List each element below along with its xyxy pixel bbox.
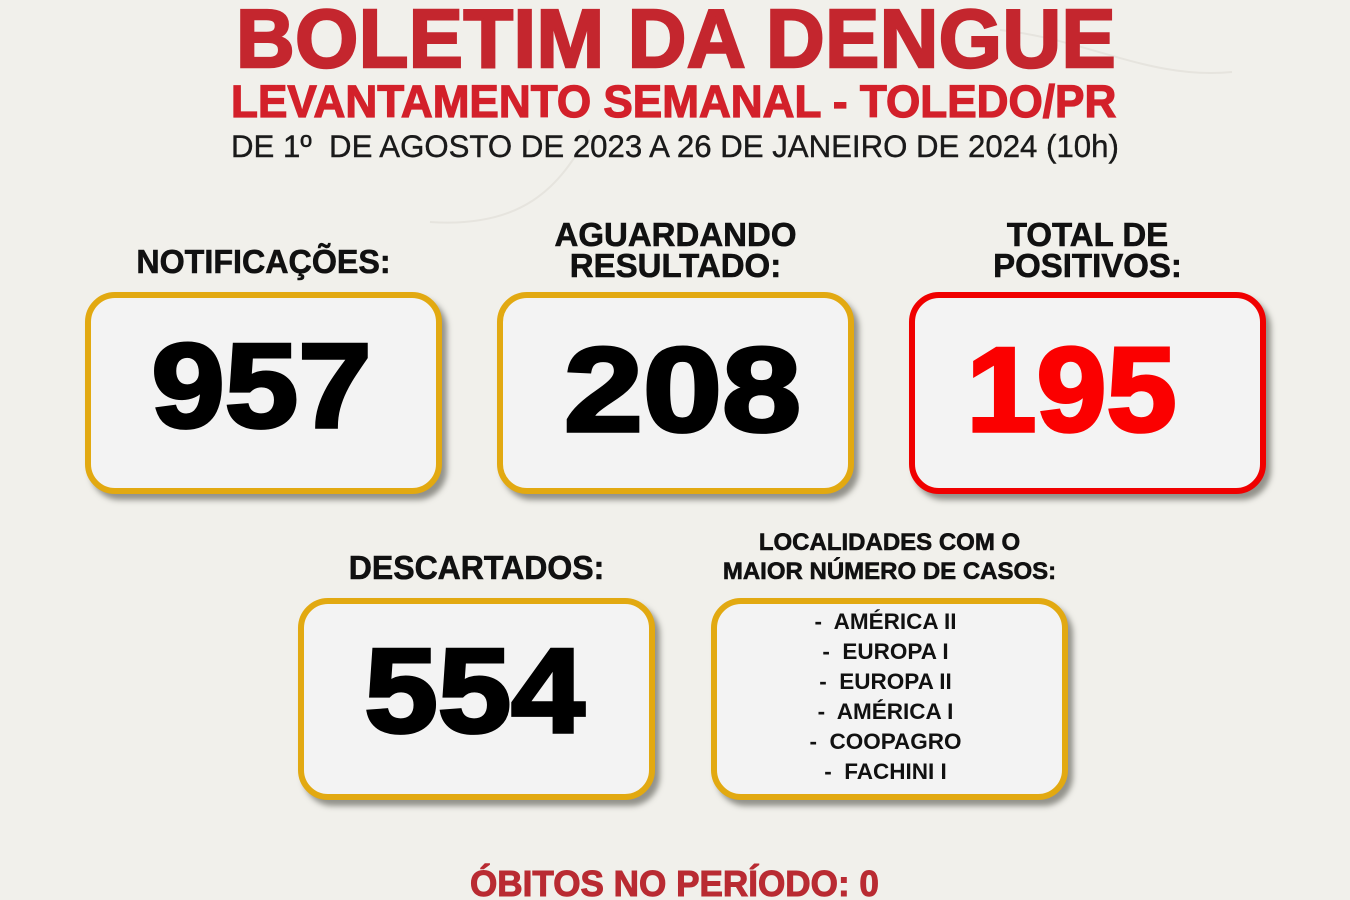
label: total de positivos [993,216,1182,284]
panel: notificações [85,292,442,494]
panel: localidades: - AMÉRICA II [814,609,957,634]
label: descartados: DESCARTADOS: [349,549,604,586]
label: total de positivos: TOTAL DE [1007,216,1168,253]
subtitle: LEVANTAMENTO SEMANAL - TOLEDO/PR [231,76,1116,127]
panel: localidades: - EUROPA II [819,669,952,694]
label: total de positivos: POSITIVOS: [993,247,1182,284]
label: aguardando resultado: RESULTADO: [570,247,781,284]
panel: descartados: 554 [364,624,584,758]
label: localidades: MAIOR NÚMERO DE CASOS: [723,558,1056,585]
label: localidades: LOCALIDADES COM O [759,529,1020,556]
panel: total de positivos: 195 [966,323,1177,457]
panel: localidades [711,598,1068,800]
panel: descartados [298,598,655,800]
panel: aguardando resultado: 208 [564,323,801,457]
label: aguardando resultado [554,216,796,284]
label: localidades [723,529,1056,585]
panel: localidades: - AMÉRICA I [818,699,953,724]
panel: localidades: - EUROPA I [822,639,949,664]
panel: localidades: - FACHINI I [824,759,947,784]
panel: notificações: 957 [151,319,371,453]
label: notificações: NOTIFICAÇÕES: [136,243,391,280]
panel: localidades: - COOPAGRO [809,729,962,754]
panel: total de positivos [909,292,1266,494]
panel: aguardando resultado [497,292,854,494]
label: aguardando resultado: AGUARDANDO [554,216,796,253]
date range: DE 1º DE AGOSTO DE 2023 A 26 DE JANEIRO DE 2024 (10h) [231,128,1119,164]
